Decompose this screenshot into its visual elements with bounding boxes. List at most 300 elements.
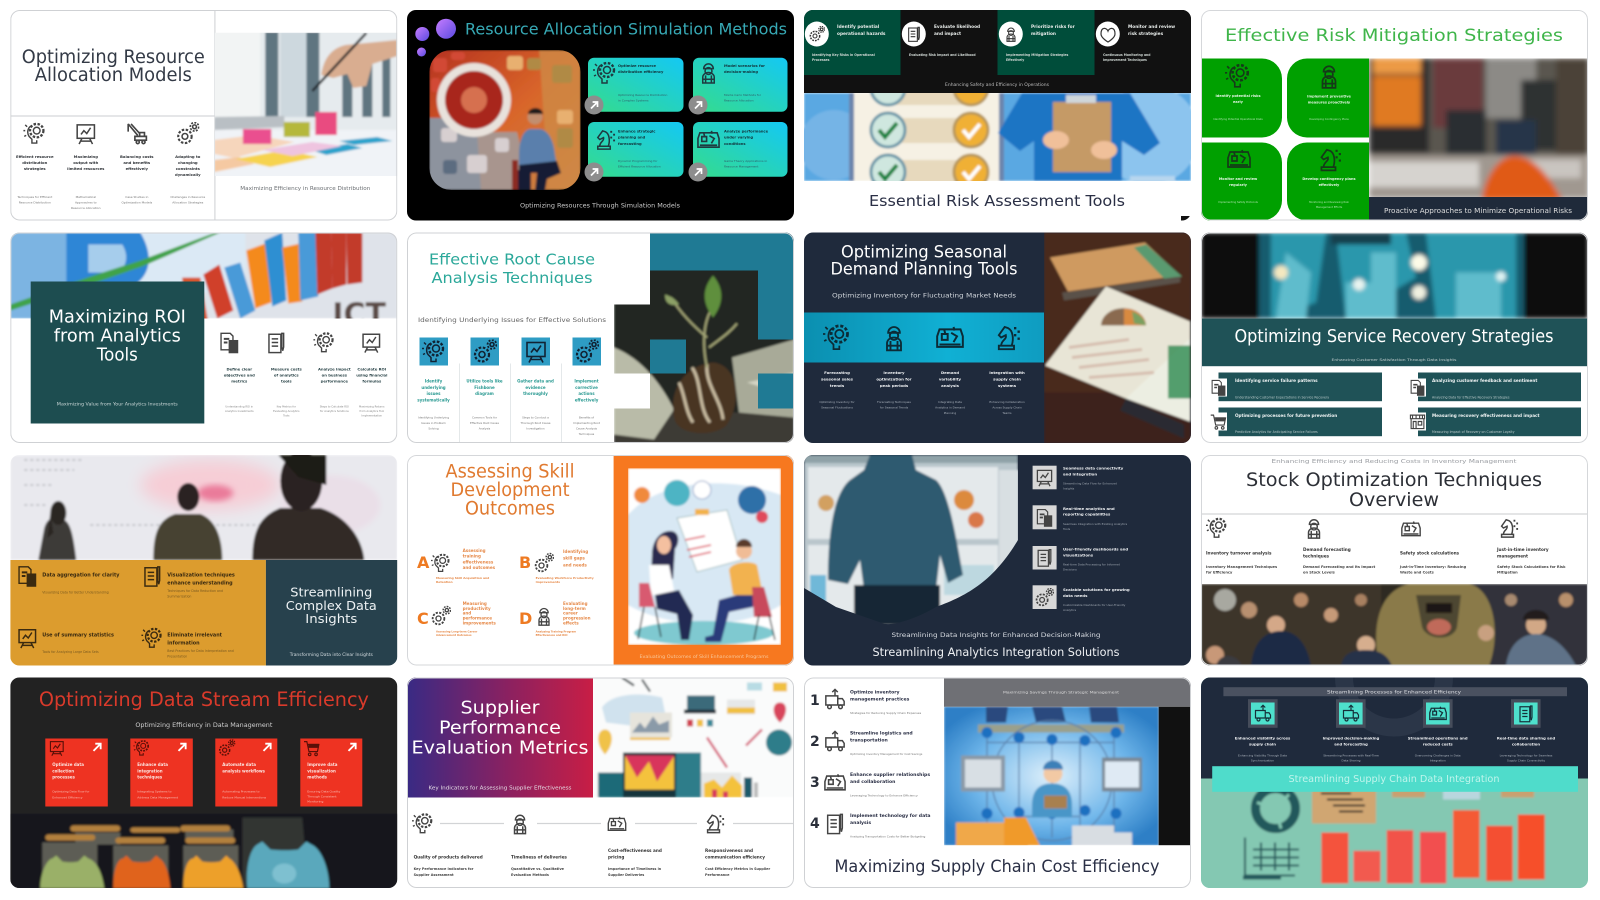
item: Improved decision-making and forecasting: and forecasting bbox=[1334, 742, 1368, 746]
feature card: Enhance strategic planning and forecasting: forecasting bbox=[618, 142, 642, 146]
item B: Identifying skill gaps and needs: Identifying bbox=[563, 549, 588, 554]
feature card: Optimize resource distribution efficiency bbox=[588, 58, 684, 112]
item: Visualization techniques enhance understanding bbox=[145, 567, 235, 598]
item: Identify underlying issues systematically: issues bbox=[426, 391, 441, 396]
item: Improved decision-making and forecasting: Data Sharing bbox=[1342, 758, 1361, 762]
slide card: Resource Allocation Simulation Methods bbox=[407, 10, 794, 220]
title band bbox=[1212, 766, 1578, 792]
item: Analyze impact on business performance: Steps to Calculate ROI bbox=[320, 404, 349, 408]
icon: worker bbox=[1322, 66, 1336, 88]
title: Demand Planning Tools bbox=[830, 260, 1018, 278]
item: Implement corrective actions effectively: Cause Analysis bbox=[576, 426, 598, 430]
card: Automate data analysis workflows: Reduce Manual Interventions bbox=[222, 796, 267, 800]
item: Balancing costs and benefits effectively: effectively bbox=[126, 166, 149, 171]
panel: Evaluate likelihood and impact bbox=[902, 22, 980, 56]
slide card: Optimizing Data Stream Efficiency bbox=[10, 678, 397, 888]
item: Demand variability analysis bbox=[935, 327, 965, 415]
item: Utilize tools like Fishbone diagram: Common Tools for bbox=[472, 416, 498, 420]
title panel: Evaluation Metrics bbox=[412, 738, 589, 758]
panel: Identify potential operational hazards: operational hazards bbox=[837, 31, 886, 37]
feature card: Enhance strategic planning and forecasting: Efficient Resource Allocation bbox=[618, 164, 661, 168]
item: Cost-effectiveness and pricing: pricing bbox=[608, 854, 624, 860]
panel: Prioritize risks for mitigation: Prioritize risks for bbox=[1031, 24, 1076, 30]
arrow buttons bbox=[584, 96, 708, 182]
slide card: Essential Risk Assessment Tools bbox=[799, 10, 1199, 221]
icon: device bbox=[221, 333, 238, 353]
item: Seamless data connectivity and integration: and integration bbox=[1063, 472, 1097, 476]
item D: Evaluating long-term career progression effects: D bbox=[519, 609, 532, 628]
item: Measuring recovery effectiveness and impact bbox=[1409, 408, 1581, 436]
panel: Evaluate likelihood and impact: Evaluating Risk Impact and Likelihood bbox=[909, 53, 976, 57]
panel: Monitor and review risk strategies: Improvement Techniques bbox=[1103, 58, 1147, 62]
icon: magnifier bbox=[220, 740, 235, 755]
card: Enhance data integration techniques: techniques bbox=[137, 774, 163, 780]
item: Calculate ROI using financial formulas: Implementation bbox=[361, 414, 382, 418]
panel: Identify potential operational hazards bbox=[804, 10, 900, 75]
feature card: Analyze performance under varying conditions: under varying bbox=[724, 136, 753, 140]
item: Identify underlying issues systematically: underlying bbox=[421, 385, 446, 390]
item: Identifying service failure patterns: Identifying service failure patterns bbox=[1235, 378, 1318, 383]
item 1: Optimize inventory management practices bbox=[810, 689, 922, 715]
item 1: Optimize inventory management practices: Optimize inventory bbox=[850, 690, 900, 696]
item A: Assessing training effectiveness and outcomes: training bbox=[463, 554, 481, 559]
item: Responsiveness and communication efficiency: Cost Efficiency Metrics in Supplier bbox=[705, 867, 770, 871]
caption: Optimizing Resources Through Simulation Models bbox=[520, 202, 680, 210]
item: Analyzing customer feedback and sentiment: Analyzing Data for Effective Recovery Strategies bbox=[1432, 396, 1510, 400]
caption bar: Maximizing Savings Through Strategic Management bbox=[1003, 690, 1120, 694]
item 4: Implement technology for data analysis: 4 bbox=[810, 816, 820, 832]
item: Efficient resource distribution strategies: strategies bbox=[24, 166, 46, 171]
panel: Identify potential operational hazards: Identify potential bbox=[837, 24, 880, 30]
card: Automate data analysis workflows: Automate data bbox=[222, 762, 256, 767]
panel: Monitor and review regularly: regularly bbox=[1229, 183, 1248, 187]
title panel: Key Indicators for Assessing Supplier Effectiveness bbox=[428, 786, 572, 792]
card: Improve data visualization methods: Improve data bbox=[307, 762, 338, 767]
icon: knight bbox=[708, 815, 723, 833]
item: Demand variability analysis: variability bbox=[939, 376, 962, 382]
item: Real-time data sharing and collaboration: Real-time data sharing and bbox=[1497, 736, 1555, 740]
card: Improve data visualization methods: methods bbox=[307, 774, 328, 780]
item: Demand variability analysis: Planning bbox=[944, 411, 956, 415]
icon: gear bbox=[810, 26, 825, 41]
item 2: Streamline logistics and transportation: Optimizing Inventory Management for Cost Savings bbox=[850, 752, 923, 756]
icon: knight bbox=[1321, 150, 1340, 170]
item: Balancing costs and benefits effectively: Optimization Models bbox=[121, 200, 153, 204]
feature card: Model scenarios for decision-making bbox=[693, 58, 788, 112]
title: Effective Risk Mitigation Strategies bbox=[1225, 26, 1563, 46]
icon: machine bbox=[608, 817, 626, 830]
icon tile bbox=[1336, 699, 1366, 728]
item: Integration with supply chain systems: Integration with bbox=[989, 370, 1025, 375]
icon: machine bbox=[698, 131, 719, 147]
item: Real-time data sharing and collaboration: collaboration bbox=[1512, 742, 1540, 746]
icon: worker bbox=[514, 815, 526, 834]
item: Integration with supply chain systems: Across Supply Chain bbox=[992, 406, 1022, 410]
item: Eliminate irrelevant information: Presentation bbox=[167, 654, 187, 658]
icon: package bbox=[825, 774, 845, 790]
item: Demand forecasting techniques bbox=[1303, 520, 1375, 574]
item: Demand forecasting techniques: Demand forecasting bbox=[1303, 547, 1351, 552]
icon: hand and people bbox=[536, 554, 554, 571]
icon: cart bbox=[304, 742, 319, 756]
title box: Maximizing ROI bbox=[49, 306, 186, 328]
icon: notepad bbox=[145, 567, 160, 586]
icon: knight bbox=[598, 131, 614, 149]
item: Improved decision-making and forecasting: Streamlining Processes with Real-Time bbox=[1323, 754, 1379, 758]
item A: Assessing training effectiveness and outcomes: Retention bbox=[436, 580, 453, 584]
item: Scalable solutions for growing data needs bbox=[1033, 585, 1130, 612]
item: Quality of products delivered: Supplier Assessment bbox=[414, 873, 454, 877]
title: Development bbox=[450, 480, 570, 501]
item D: Evaluating long-term career progression effects: career bbox=[563, 611, 578, 616]
item: Measure costs of analytics tools: of analytics bbox=[274, 372, 299, 378]
item: Identify underlying issues systematically: Identify bbox=[425, 378, 443, 384]
icon: gear bulb bbox=[412, 814, 431, 833]
item: Inventory optimization for peak periods: Inventory bbox=[883, 370, 905, 375]
item: Seamless data connectivity and integration: Streamlining Data Flow for Enhanced bbox=[1063, 482, 1117, 486]
card: Optimize data collection processes: Optimize data bbox=[52, 762, 84, 767]
panel: Identify potential risks early: Identifying Potential Operational Risks bbox=[1213, 117, 1263, 121]
item: Utilize tools like Fishbone diagram: Analysis bbox=[479, 426, 491, 430]
title panel: Supplier bbox=[460, 698, 540, 718]
item: Forecasting seasonal sales trends: trends bbox=[830, 383, 845, 388]
item: Balancing costs and benefits effectively bbox=[120, 124, 154, 204]
card: Optimize data collection processes: collection bbox=[52, 768, 74, 774]
item: Define clear objectives and metrics: Analytics Investments bbox=[225, 409, 254, 413]
subtitle: Optimizing Inventory for Fluctuating Market Needs bbox=[832, 292, 1016, 300]
item D: Evaluating long-term career progression effects: progression bbox=[563, 616, 591, 621]
icon: presentation board bbox=[77, 125, 94, 144]
item 2: Streamline logistics and transportation: 2 bbox=[810, 734, 820, 750]
item: Gather data and evidence thoroughly: Gather data and bbox=[517, 378, 554, 384]
icon: gear bulb bbox=[141, 629, 161, 647]
panel: Identify potential risks early: Identify potential risks bbox=[1215, 94, 1261, 98]
panel: Identify potential risks early: early bbox=[1233, 100, 1244, 104]
item: Identify underlying issues systematically: Solving bbox=[428, 426, 439, 430]
item: Utilize tools like Fishbone diagram bbox=[466, 338, 503, 430]
item: Cost-effectiveness and pricing: Cost-effectiveness and bbox=[608, 848, 662, 853]
card: Enhance data integration techniques: Integrating Systems to bbox=[137, 790, 172, 794]
icon: gear bulb bbox=[593, 63, 614, 83]
item: Forecasting seasonal sales trends: seasonal sales bbox=[821, 376, 854, 382]
item: User-friendly dashboards and visualizations: visualizations bbox=[1063, 552, 1094, 558]
card: Optimize data collection processes: Enhanced Efficiency bbox=[52, 796, 83, 800]
item: Balancing costs and benefits effectively: Case Studies in bbox=[125, 195, 148, 199]
caption bar: Proactive Approaches to Minimize Operational Risks bbox=[1384, 207, 1573, 215]
panel: Develop contingency plans effectively: Monitoring and Reviewing Risk bbox=[1309, 200, 1349, 204]
item D: Evaluating long-term career progression effects: Evaluating bbox=[563, 601, 588, 606]
item: Streamlined operations and reduced costs: Streamlined operations and bbox=[1408, 736, 1468, 740]
title band: Streamlining Supply Chain Data Integration bbox=[1288, 774, 1500, 785]
item: Quality of products delivered: Quality of products delivered bbox=[414, 854, 483, 860]
icon: delivery bbox=[826, 731, 844, 751]
panel: Develop contingency plans effectively: effectively bbox=[1319, 183, 1340, 187]
item: Streamlined operations and reduced costs: Overcoming Challenges in Data bbox=[1415, 754, 1461, 758]
icon: map screen bbox=[19, 630, 36, 648]
item: Just-in-time inventory management: Just-in-time inventory bbox=[1496, 547, 1549, 552]
item: Utilize tools like Fishbone diagram: Fishbone bbox=[474, 385, 495, 390]
item: Safety stock calculations: Waste and Costs bbox=[1400, 570, 1434, 574]
slide card: Optimizing Resource Allocation Models bbox=[10, 10, 400, 220]
item: Data aggregation for clarity: Data aggregation for clarity bbox=[42, 572, 120, 578]
panel: Monitor and review regularly: Monitor and review bbox=[1219, 177, 1258, 181]
feature card: Enhance strategic planning and forecasting bbox=[588, 122, 684, 177]
title: Analysis Techniques bbox=[432, 269, 592, 287]
item: Implement corrective actions effectively: corrective bbox=[575, 385, 598, 390]
feature card: Model scenarios for decision-making: Model scenarios for bbox=[724, 64, 765, 68]
item B: Identifying skill gaps and needs: and needs bbox=[563, 562, 587, 568]
item: Maximizing output with limited resources: Approaches to bbox=[75, 200, 97, 204]
title: Overview bbox=[1349, 489, 1439, 511]
title: Maximizing Supply Chain Cost Efficiency bbox=[834, 857, 1160, 876]
item 3: Enhance supplier relationships and collaboration: Leveraging Technology to Enhance Efficiency bbox=[850, 794, 918, 798]
panel: Identify potential operational hazards: Identifying Key Risks in Operational bbox=[812, 53, 875, 57]
item: Adapting to changing constraints dynamically bbox=[170, 123, 205, 204]
item: Seamless data connectivity and integration bbox=[1033, 466, 1124, 490]
item: Real-time data sharing and collaboration: Supply Chain Connectivity bbox=[1507, 758, 1545, 762]
panel: Monitor and review regularly: Implementing Safety Protocols bbox=[1218, 200, 1259, 204]
card: Improve data visualization methods: Ensuring Data Quality bbox=[307, 790, 340, 794]
item: Integration with supply chain systems: Enhancing Collaboration bbox=[989, 400, 1025, 404]
item: Define clear objectives and metrics bbox=[221, 333, 255, 413]
photo: glowing blue glass jars bbox=[1201, 232, 1588, 318]
slide card: Streamlining Analytics Integration Solutions bbox=[804, 455, 1191, 666]
item: Visualization techniques enhance understanding: Summarization bbox=[167, 594, 191, 598]
title: Optimizing Seasonal bbox=[841, 242, 1007, 262]
item 1: Optimize inventory management practices: management practices bbox=[850, 696, 910, 702]
item: Gather data and evidence thoroughly: thoroughly bbox=[523, 391, 548, 396]
title: Effective Root Cause bbox=[429, 250, 595, 268]
item: Maximizing output with limited resources: Maximizing bbox=[74, 154, 98, 159]
slide card: Streamlining Supply Chain Data Integration bbox=[1201, 628, 1588, 888]
feature card: Analyze performance under varying conditions: Resource Management bbox=[724, 164, 759, 168]
item C: Measuring productivity and performance improvements: Measuring bbox=[463, 601, 487, 606]
card: Automate data analysis workflows: analysis workflows bbox=[222, 768, 266, 774]
item: Inventory optimization for peak periods: Forecasting Techniques bbox=[877, 400, 911, 404]
item: Real-time data sharing and collaboration bbox=[1497, 699, 1555, 762]
card: Optimize data collection processes bbox=[45, 738, 108, 806]
item: Optimizing processes for future prevention bbox=[1210, 408, 1382, 436]
panel: Prioritize risks for mitigation: Implementing Mitigation Strategies bbox=[1006, 53, 1069, 57]
title: Complex Data bbox=[286, 599, 377, 614]
item: Efficient resource distribution strategies: Resource Distribution bbox=[19, 200, 51, 204]
item C: Measuring productivity and performance improvements: and bbox=[463, 611, 471, 616]
feature card: Enhance strategic planning and forecasting: Enhance strategic bbox=[618, 130, 655, 134]
icon: gear bulb bbox=[23, 124, 43, 143]
card: Automate data analysis workflows bbox=[215, 738, 277, 806]
item: Eliminate irrelevant information bbox=[141, 629, 234, 658]
item: Real-time analytics and reporting capabilities: Real-time analytics and bbox=[1063, 506, 1115, 511]
subtitle: Enhancing Efficiency and Reducing Costs in Inventory Management bbox=[1272, 459, 1518, 465]
item: Visualization techniques enhance understanding: Techniques for Data Reduction and bbox=[166, 589, 223, 593]
feature card: Enhance strategic planning and forecasting: Dynamic Programming for bbox=[618, 159, 658, 163]
icon: machine bbox=[1402, 522, 1420, 536]
card: Improve data visualization methods: visualization bbox=[307, 768, 336, 774]
item: User-friendly dashboards and visualizations: User-friendly dashboards and bbox=[1063, 546, 1128, 552]
item 4: Implement technology for data analysis: Implement technology for data bbox=[850, 813, 930, 819]
card: Optimize data collection processes: Optimizing Data Flow for bbox=[52, 790, 90, 794]
feature card: Model scenarios for decision-making: Resource Allocation bbox=[724, 98, 754, 102]
item: Cost-effectiveness and pricing: Importance of Timeliness in bbox=[608, 867, 662, 871]
item: Implement corrective actions effectively: Benefits of bbox=[579, 416, 595, 420]
card: Optimize data collection processes: processes bbox=[52, 774, 75, 780]
card: Enhance data integration techniques: Enhance data bbox=[137, 762, 168, 767]
item: Maximizing output with limited resources: Mathematical bbox=[76, 195, 96, 199]
item: Utilize tools like Fishbone diagram: Utilize tools like bbox=[466, 378, 503, 384]
item: Integration with supply chain systems: supply chain bbox=[993, 376, 1021, 382]
icon tile bbox=[1033, 546, 1057, 570]
title: Optimizing Data Stream Efficiency bbox=[39, 688, 369, 711]
item: Inventory optimization for peak periods: for Seasonal Trends bbox=[880, 406, 909, 410]
item: Calculate ROI using financial formulas: from Analytics Tool bbox=[360, 409, 384, 413]
item: Demand forecasting techniques: Demand Forecasting and Its Impact bbox=[1303, 565, 1375, 569]
item: Analyze impact on business performance: for Analytics Solutions bbox=[320, 409, 349, 413]
item: Calculate ROI using financial formulas: using financial bbox=[356, 372, 387, 378]
item C: Measuring productivity and performance improvements: Advancement Outcomes bbox=[436, 633, 472, 637]
item: Scalable solutions for growing data needs: Scalable solutions for growing bbox=[1063, 587, 1130, 592]
item C: Measuring productivity and performance improvements: C bbox=[417, 609, 429, 628]
item D: Evaluating long-term career progression effects: Analyzing Training Program bbox=[536, 630, 576, 634]
header bar bbox=[1223, 687, 1567, 696]
item 3: Enhance supplier relationships and collaboration bbox=[810, 772, 930, 798]
item 1: Optimize inventory management practices: Strategies for Reducing Supply Chain Expenses bbox=[850, 711, 922, 715]
slide card: Streamlining Complex Data Insights bbox=[10, 451, 397, 666]
panel: Implement preventive measures proactively: Developing Contingency Plans bbox=[1309, 117, 1349, 121]
item: Scalable solutions for growing data needs: Analytics bbox=[1063, 608, 1077, 612]
title box bbox=[31, 282, 204, 424]
icon: gears bbox=[178, 123, 199, 143]
icon: gear bulb bbox=[313, 333, 333, 352]
item: Safety stock calculations: Just-in-Time Inventory: Reducing bbox=[1399, 565, 1467, 569]
icon: crane bbox=[128, 124, 146, 144]
item: Inventory turnover analysis: Inventory Management Techniques bbox=[1206, 565, 1277, 569]
item: Measure costs of analytics tools: Key Metrics for bbox=[277, 404, 297, 408]
item: Visualization techniques enhance understanding: Visualization techniques bbox=[167, 572, 235, 578]
item: Define clear objectives and metrics: Define clear bbox=[226, 366, 252, 372]
feature card: Optimize resource distribution efficiency: Optimize resource bbox=[618, 64, 657, 68]
item: Real-time data sharing and collaboration: Leveraging Technology for Seamless bbox=[1500, 754, 1553, 758]
icon: worker bbox=[887, 327, 901, 350]
item: Measure costs of analytics tools: Measure costs bbox=[271, 366, 302, 372]
item: Calculate ROI using financial formulas bbox=[356, 334, 387, 418]
header bar: Streamlining Processes for Enhanced Efficiency bbox=[1327, 690, 1461, 696]
item C: Measuring productivity and performance improvements bbox=[417, 601, 496, 637]
item: Responsiveness and communication efficiency: communication efficiency bbox=[705, 854, 765, 860]
item: Analyze impact on business performance: performance bbox=[321, 378, 348, 384]
item: Implement corrective actions effectively bbox=[572, 338, 601, 436]
item: Inventory turnover analysis: Inventory turnover analysis bbox=[1206, 550, 1272, 556]
photo: man seated before collage bbox=[429, 50, 581, 191]
item: Forecasting seasonal sales trends: Optimizing Inventory for bbox=[819, 400, 855, 404]
title: Resource Allocation Simulation Methods bbox=[465, 20, 787, 38]
illustration: two people reviewing a clipboard bbox=[628, 468, 781, 645]
item: Adapting to changing constraints dynamically: Challenges in Resource bbox=[170, 195, 205, 199]
item: Efficient resource distribution strategies: Techniques for Efficient bbox=[16, 195, 53, 199]
feature card: Model scenarios for decision-making: decision-making bbox=[724, 70, 758, 74]
item 2: Streamline logistics and transportation bbox=[810, 730, 923, 756]
photo: jars and coloured piggy banks bbox=[10, 814, 398, 888]
slide card: Maximizing Supply Chain Cost Efficiency bbox=[804, 678, 1191, 888]
title band: Optimizing Service Recovery Strategies bbox=[1234, 327, 1554, 347]
item B: Identifying skill gaps and needs: B bbox=[519, 553, 531, 572]
item: Enhanced visibility across supply chain: supply chain bbox=[1249, 742, 1276, 746]
item: Maximizing output with limited resources: output with bbox=[73, 160, 99, 165]
title: Optimizing Resource bbox=[22, 47, 205, 68]
item: Demand forecasting techniques: techniques bbox=[1303, 554, 1330, 559]
item: Identifying service failure patterns: Understanding Customer Expectations in Service Recovery bbox=[1235, 396, 1329, 400]
panel: Implement preventive measures proactively bbox=[1287, 58, 1369, 138]
item: Scalable solutions for growing data needs: data needs bbox=[1063, 593, 1088, 598]
panel: Evaluate likelihood and impact: and impact bbox=[934, 31, 961, 37]
item: Calculate ROI using financial formulas: Maximizing Returns bbox=[359, 404, 385, 408]
photo: three people facing a data wall bbox=[10, 455, 397, 560]
card: Automate data analysis workflows: Automating Processes to bbox=[222, 790, 260, 794]
icon: device bbox=[19, 567, 36, 586]
card: Enhance data integration techniques: Address Data Management bbox=[137, 796, 179, 800]
title: Outcomes bbox=[465, 498, 555, 520]
item: Balancing costs and benefits effectively: Balancing costs bbox=[120, 154, 154, 159]
item: Just-in-time inventory management: Safety Stock Calculations for Risk bbox=[1497, 565, 1566, 569]
item: Real-time analytics and reporting capabilities: Seamless Integration with Existing Analytics bbox=[1063, 522, 1128, 526]
item: Demand forecasting techniques: on Stock Levels bbox=[1303, 570, 1335, 574]
item D: Evaluating long-term career progression effects: effects bbox=[563, 621, 579, 626]
item: Seamless data connectivity and integration: Seamless data connectivity bbox=[1063, 466, 1124, 470]
title: Streamlining Analytics Integration Solutions bbox=[872, 645, 1120, 659]
item C: Measuring productivity and performance improvements: productivity bbox=[463, 606, 491, 611]
icon: heart monitor bbox=[1101, 28, 1115, 42]
item: Measuring recovery effectiveness and impact: Measuring recovery effectiveness and impact bbox=[1432, 413, 1540, 418]
subtitle: Identifying Underlying Issues for Effective Solutions bbox=[418, 317, 606, 324]
item: Timeliness of deliveries: Quantitative vs. Qualitative bbox=[511, 867, 565, 871]
item: Eliminate irrelevant information: Eliminate irrelevant bbox=[167, 632, 223, 638]
item: Maximizing output with limited resources: Resource Allocation bbox=[71, 206, 101, 210]
item: Integration with supply chain systems bbox=[989, 327, 1025, 415]
feature card: Optimize resource distribution efficiency: in Complex Systems bbox=[618, 98, 649, 102]
arrow bbox=[264, 744, 271, 751]
item: Implement corrective actions effectively: effectively bbox=[575, 398, 599, 402]
item B: Identifying skill gaps and needs: Evaluating Workforce Productivity bbox=[536, 576, 594, 580]
caption: Evaluating Outcomes of Skill Enhancement Programs bbox=[640, 654, 768, 659]
icon tile bbox=[1033, 505, 1057, 529]
title band bbox=[1201, 318, 1588, 366]
item: Adapting to changing constraints dynamically: dynamically bbox=[175, 172, 201, 177]
item 3: Enhance supplier relationships and collaboration: Enhance supplier relationships bbox=[850, 772, 930, 778]
item: Adapting to changing constraints dynamically: Allocation Strategies bbox=[172, 200, 204, 204]
slide card: Stock Optimization Techniques Overview bbox=[1201, 455, 1588, 666]
item: Forecasting seasonal sales trends: Forecasting bbox=[824, 370, 850, 375]
icon: worker bbox=[1308, 520, 1320, 538]
item: Real-time analytics and reporting capabilities: reporting capabilities bbox=[1063, 512, 1111, 516]
item: Forecasting seasonal sales trends: Seasonal Fluctuations bbox=[821, 406, 853, 410]
item: Gather data and evidence thoroughly: Investigation bbox=[526, 426, 545, 430]
item: Measure costs of analytics tools: tools bbox=[281, 378, 292, 384]
item: Timeliness of deliveries bbox=[511, 815, 567, 877]
item: Demand variability analysis: Analytics in Demand bbox=[935, 406, 965, 410]
item: Measure costs of analytics tools: Tools bbox=[283, 414, 290, 418]
item: Optimizing processes for future prevention: Predictive Analytics for Anticipating Service Failures bbox=[1235, 430, 1318, 434]
card: Improve data visualization methods bbox=[300, 738, 362, 806]
item: Quality of products delivered bbox=[412, 814, 483, 877]
panel: Evaluate likelihood and impact: Evaluate likelihood bbox=[934, 24, 980, 30]
title band: Enhancing Customer Satisfaction Through Data Insights bbox=[1332, 357, 1457, 362]
panel: Monitor and review risk strategies: risk strategies bbox=[1128, 31, 1164, 37]
item: Eliminate irrelevant information: Best Practices for Data Interpretation and bbox=[167, 649, 234, 653]
item: Safety stock calculations bbox=[1399, 522, 1467, 574]
title panel: Performance bbox=[439, 718, 561, 738]
subtitle: Streamlining Data Insights for Enhanced Decision-Making bbox=[892, 632, 1100, 639]
card: Improve data visualization methods: Monitoring bbox=[307, 800, 323, 804]
item: Timeliness of deliveries: Evaluation Methods bbox=[511, 873, 549, 877]
